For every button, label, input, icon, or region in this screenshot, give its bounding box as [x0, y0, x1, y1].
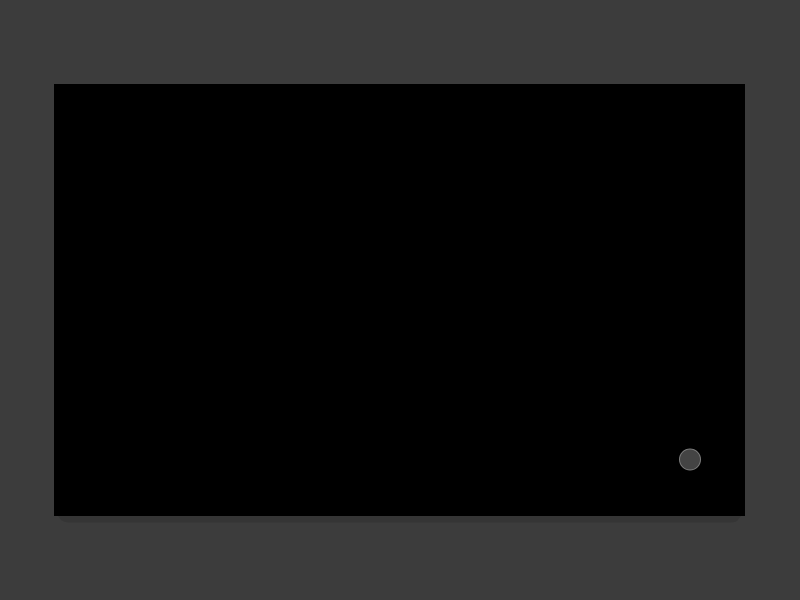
- panel shadow: [58, 516, 741, 522]
- black panel: [54, 84, 745, 516]
- circular button: [680, 449, 700, 470]
